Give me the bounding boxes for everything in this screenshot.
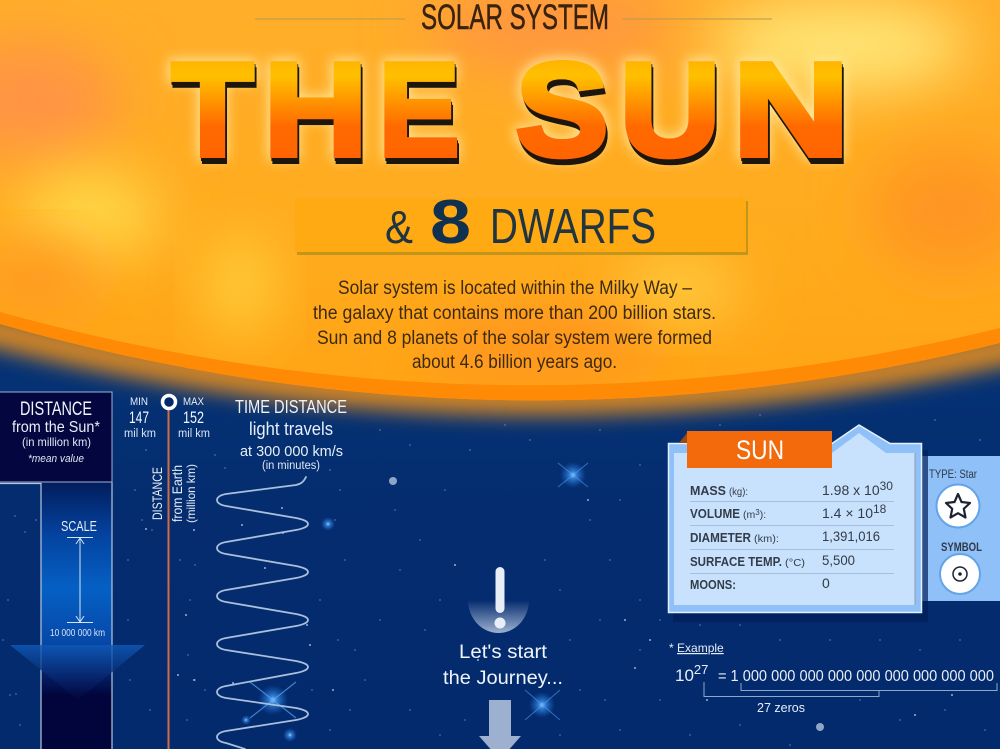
journey text: the Journey... (443, 668, 563, 689)
panel: sun data card (668, 425, 1000, 622)
data rows: 1,391,016 (822, 528, 880, 544)
earth distance axis: mil km (124, 428, 156, 440)
side panel: type and symbol: TYPE: Star (929, 469, 977, 481)
light travel wave (217, 477, 308, 749)
example note: 27 zeros (757, 701, 805, 715)
data rows: SURFACE TEMP. (690, 554, 782, 569)
intro text: Sun and 8 planets of the solar system were formed (317, 328, 712, 349)
data rows: 5,500 (822, 552, 855, 568)
heading box: from the Sun* (12, 419, 100, 436)
lens flare stars (241, 462, 824, 742)
subtitle banner: 8 (430, 188, 471, 257)
earth distance axis: from Earth (169, 465, 185, 522)
heading box: DISTANCE (20, 399, 92, 420)
data rows: MOONS: (690, 577, 736, 592)
time distance heading: TIME DISTANCE (235, 397, 347, 417)
earth distance axis: mil km (178, 428, 210, 440)
earth distance axis: DISTANCE (149, 467, 165, 520)
main title: H (264, 36, 367, 183)
earth distance axis: 147 (129, 408, 149, 427)
earth distance axis: (million km) (184, 464, 198, 523)
heading box: (in million km) (22, 435, 91, 449)
earth distance axis: MIN (130, 396, 148, 408)
sun tab (679, 431, 832, 468)
heading box (0, 392, 112, 482)
example note (669, 641, 997, 715)
scale marker: 10 000 000 km (50, 627, 105, 639)
intro text: about 4.6 billion years ago. (412, 352, 617, 373)
scale marker: SCALE (61, 518, 97, 535)
data rows (690, 479, 894, 592)
time distance heading: (in minutes) (262, 460, 320, 472)
main title: N (733, 36, 849, 183)
data rows: ): (760, 509, 766, 521)
intro text: the galaxy that contains more than 200 billion stars. (313, 303, 716, 324)
sun surface (0, 0, 1000, 420)
time distance heading: at 300 000 km/s (240, 443, 343, 460)
icon: star (946, 494, 970, 518)
arrow: down (479, 700, 521, 749)
data rows: 1.98 x 10 (822, 482, 880, 498)
data rows: 0 (822, 575, 830, 591)
data rows: DIAMETER (690, 530, 752, 545)
main title: S (516, 36, 608, 183)
data rows: VOLUME (690, 506, 740, 521)
example note: 10 (675, 666, 694, 685)
subtitle banner: DWARFS (490, 200, 656, 254)
subtitle banner: & (385, 201, 413, 253)
data rows: 18 (873, 502, 887, 516)
card body (673, 432, 928, 622)
subtitle banner (295, 188, 748, 257)
data rows: 1.4 × 10 (822, 505, 873, 521)
example note: 27 (694, 662, 708, 677)
data rows: (m (743, 509, 755, 521)
space background (0, 300, 1000, 749)
scale marker (50, 518, 105, 639)
intro text: Solar system is located within the Milky Way – (338, 278, 692, 299)
starfield (3, 415, 985, 745)
main title: E (379, 36, 459, 183)
earth distance axis: MAX (183, 396, 205, 408)
panel: distance from the sun column (0, 392, 145, 749)
data rows: MASS (690, 483, 726, 498)
heading box: *mean value (28, 453, 84, 465)
main title: T (172, 36, 253, 183)
icon: sun symbol (953, 567, 967, 581)
journey text: Let's start (459, 642, 548, 663)
data rows: (kg): (729, 486, 748, 498)
intro text (313, 278, 716, 373)
main title (172, 36, 849, 183)
earth distance axis (124, 396, 210, 749)
main title: U (620, 36, 720, 183)
data rows: 3 (755, 508, 760, 517)
time distance heading: light travels (249, 419, 333, 439)
time distance heading (235, 397, 347, 472)
side panel: type and symbol (920, 456, 1000, 601)
side panel: type and symbol: SYMBOL (941, 542, 982, 554)
earth distance axis: 152 (183, 408, 204, 427)
journey text (443, 642, 563, 689)
scale triangle (10, 645, 145, 700)
icon: exclamation mark (468, 567, 529, 633)
data rows: (°C) (785, 557, 805, 569)
data rows: (km): (754, 533, 779, 545)
sun tab: SUN (736, 435, 784, 465)
sun edge glow (0, 316, 1000, 398)
data rows: 30 (880, 479, 893, 493)
example note: * Example (669, 641, 724, 655)
